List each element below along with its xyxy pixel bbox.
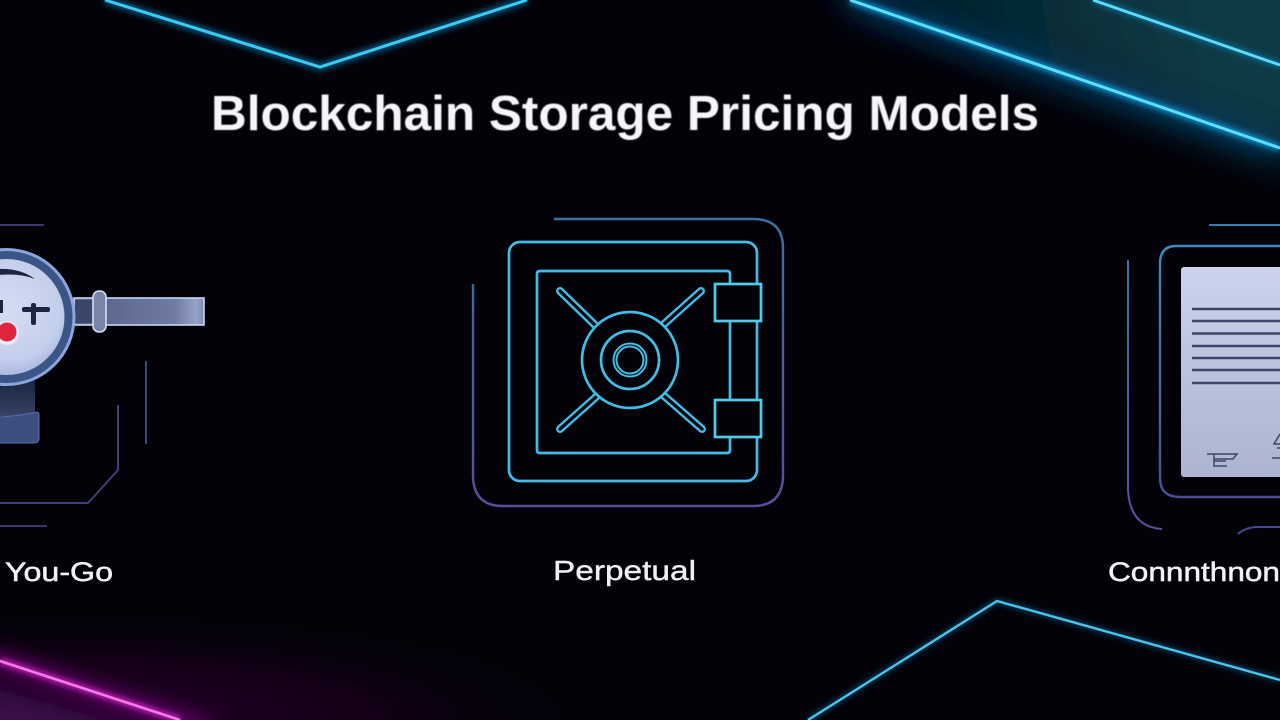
dial spokes [560, 291, 702, 429]
label: You-Go [5, 557, 113, 587]
safe door [537, 271, 730, 453]
icon: contract document [1181, 267, 1280, 477]
meter stem [0, 380, 35, 416]
signature marks [1207, 434, 1280, 466]
safe body [509, 242, 757, 481]
frame bracket [1128, 225, 1280, 534]
neon line: top right long [850, 0, 1280, 148]
frame bracket [473, 219, 783, 506]
meter dial [0, 248, 76, 386]
icon: safe [509, 242, 761, 481]
device frame [1160, 246, 1280, 497]
meter lower collar [0, 412, 39, 443]
title: Blockchain Storage Pricing Models [211, 87, 1039, 141]
neon line: top right short [1093, 0, 1280, 65]
neon line: top chevron [105, 0, 527, 67]
frame brackets [0, 225, 146, 526]
hinge top [715, 284, 761, 321]
panel: commitment [1108, 225, 1280, 587]
contract text lines [1192, 309, 1280, 383]
panel: perpetual [473, 219, 783, 586]
label: Connnthnon [1108, 557, 1280, 587]
neon line: bottom right peak [808, 601, 1280, 720]
dial rings [582, 312, 678, 408]
meter pipe [74, 291, 204, 332]
neon line: bottom left magenta [0, 654, 210, 720]
panel: pay as you go [0, 225, 204, 587]
icon: water meter [0, 248, 204, 443]
label: Perpetual [553, 555, 696, 586]
hinge bottom [715, 400, 761, 437]
